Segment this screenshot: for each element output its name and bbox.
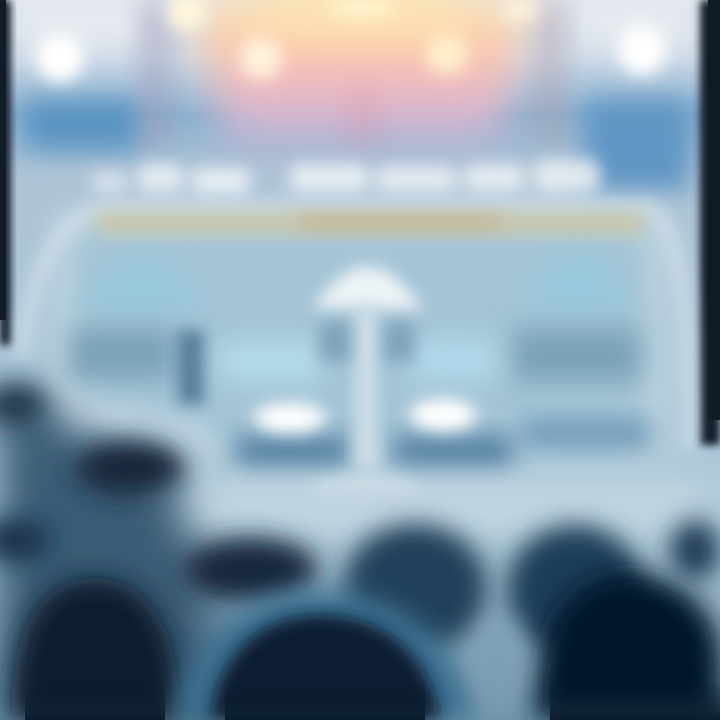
spotlights [36, 0, 666, 82]
heading text smudges [92, 160, 600, 194]
right information panel [392, 255, 650, 466]
central lamp podium [310, 266, 424, 512]
side curtains [0, 0, 720, 445]
white ovals [254, 399, 476, 433]
bottom edge fade [25, 680, 165, 720]
stage light glow [140, 0, 565, 150]
front heads [343, 524, 487, 652]
left audience mass [0, 385, 240, 720]
audience silhouettes [0, 385, 720, 720]
golden banner line [95, 212, 645, 234]
stage floor [30, 385, 700, 532]
left information panel [70, 262, 350, 466]
screen panel [22, 208, 688, 460]
